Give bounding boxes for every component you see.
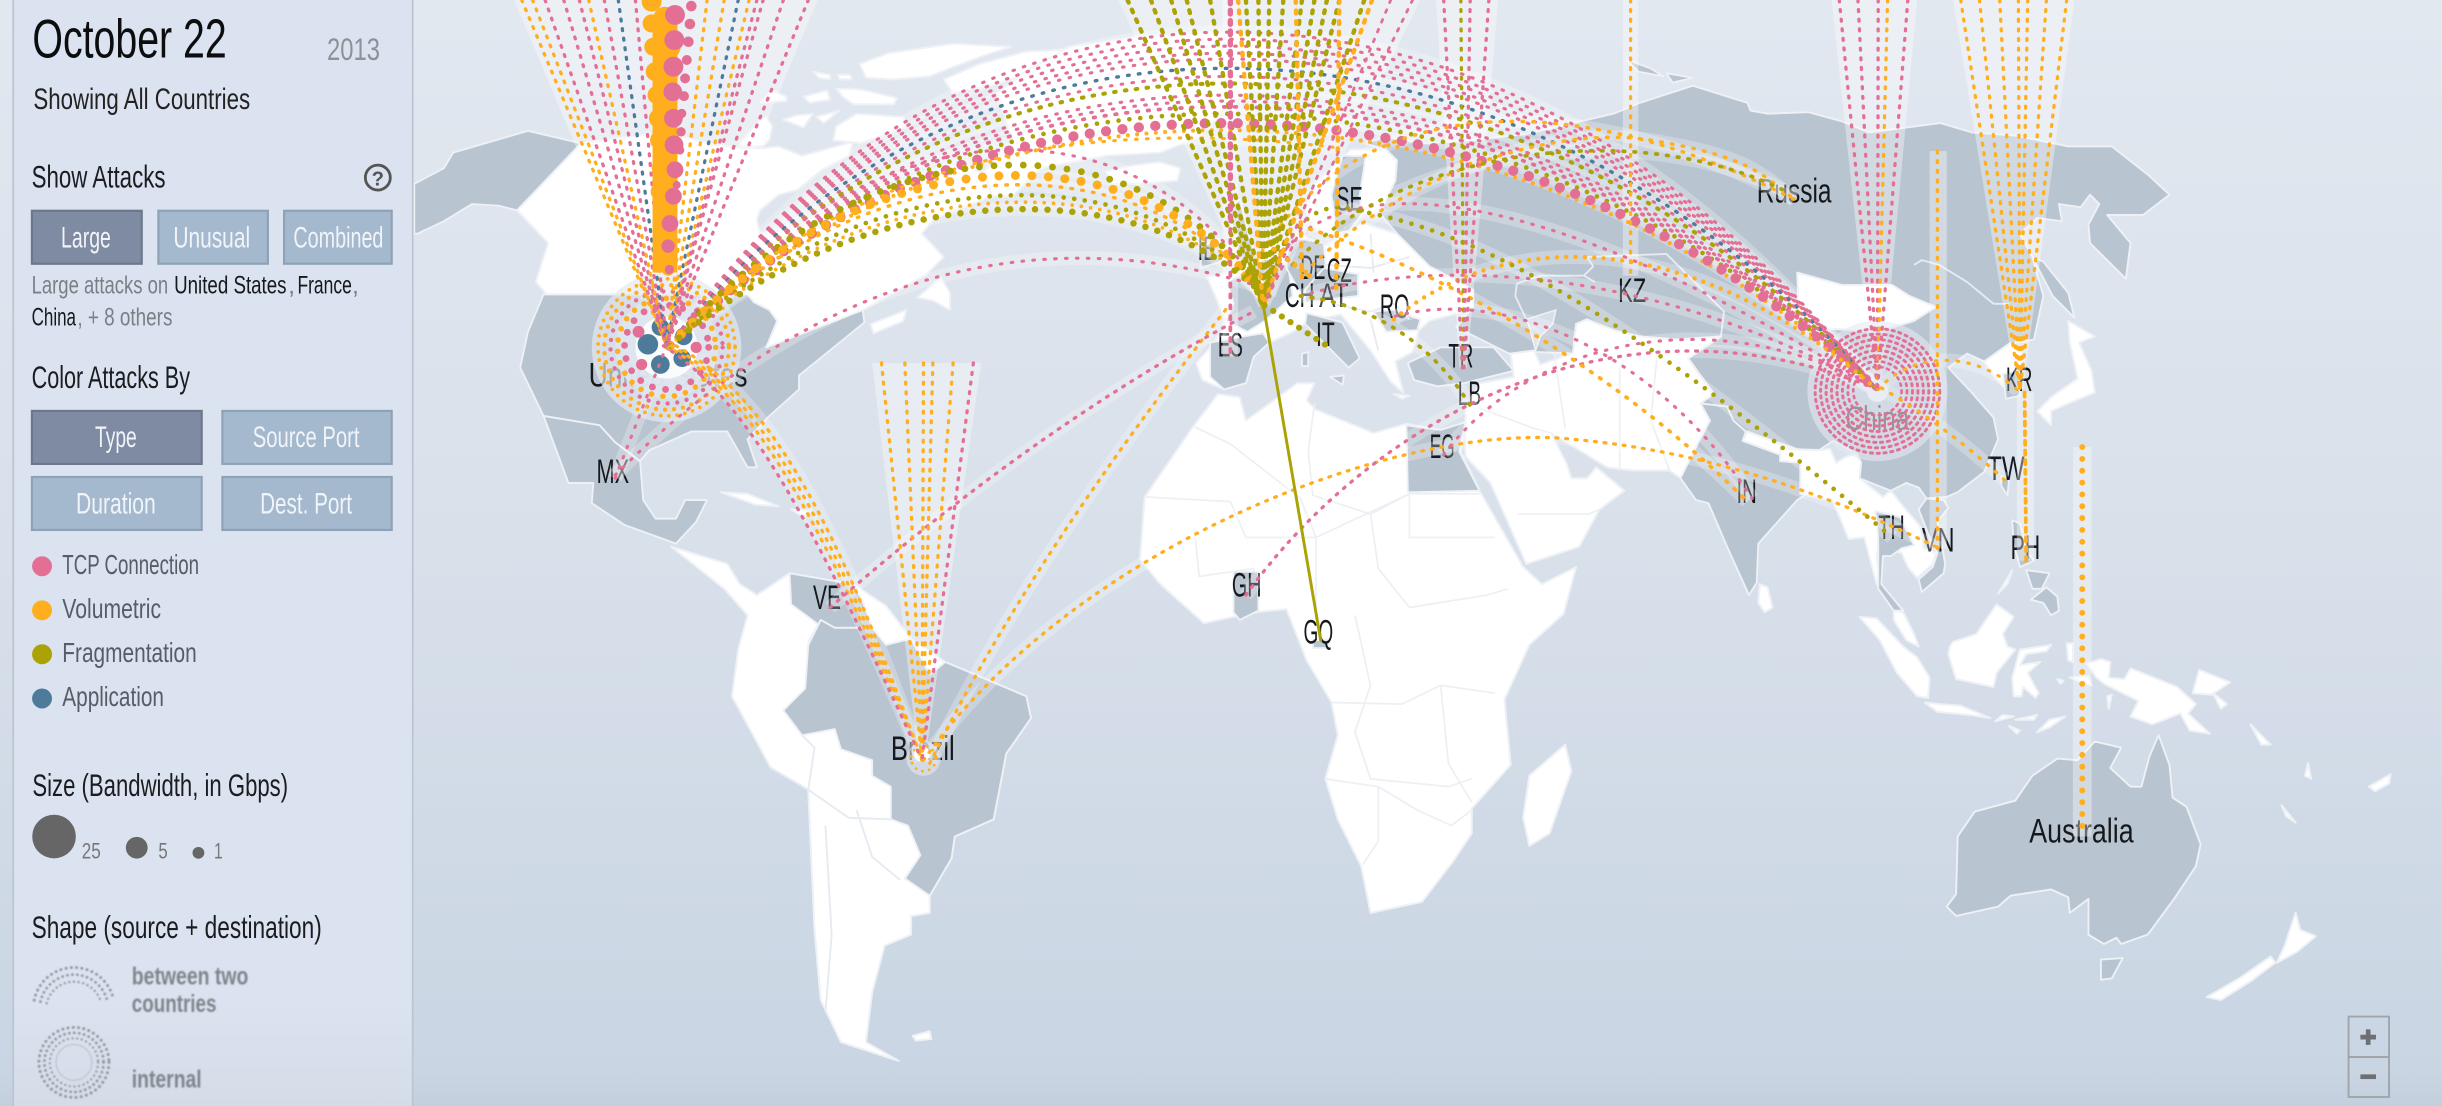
label: United States: United States <box>589 356 748 394</box>
legend: Application <box>32 681 164 712</box>
size legend: 5 <box>158 838 168 863</box>
label: China: China <box>1846 400 1910 438</box>
shape legend: internal: internal <box>132 1065 202 1093</box>
label: VN: VN <box>1922 521 1955 559</box>
country: Brazil <box>783 620 1031 896</box>
description of large attacks: , <box>352 272 359 300</box>
land: Caribbean <box>721 492 810 517</box>
label: TW: TW <box>1987 450 2025 488</box>
land: Canadian Arctic islands <box>740 44 1067 333</box>
label: EG: EG <box>1430 428 1455 466</box>
button: Dest. Port <box>222 477 392 530</box>
country: UK <box>1226 199 1258 265</box>
internal attacks circle: China <box>1807 321 1948 461</box>
country: Italy <box>1305 313 1360 368</box>
land: Korea <box>1984 343 2025 389</box>
country labels <box>589 173 2134 851</box>
borders: Africa <box>1145 403 1508 865</box>
land: Mongolia <box>1797 273 1936 332</box>
legend: Volumetric <box>32 593 161 624</box>
country: Egypt <box>1406 422 1480 492</box>
title: date: October 22 <box>32 9 227 70</box>
land: South America <box>671 547 1031 1061</box>
borders: Middle East <box>1480 355 1670 514</box>
button: Combined: Combined <box>293 222 383 255</box>
label: IN: IN <box>1736 473 1757 511</box>
size legend: 1 <box>214 838 223 863</box>
legend: Fragmentation: Fragmentation <box>62 637 197 668</box>
borders: South America <box>771 735 900 1013</box>
heading: Show Attacks: Show Attacks <box>32 160 166 195</box>
subtitle: Showing All Countries <box>33 83 250 116</box>
land: Caspian Sea <box>1526 310 1556 350</box>
world map <box>414 31 2391 1061</box>
country: Romania <box>1374 310 1420 332</box>
arc halos <box>615 32 2018 763</box>
label: SE: SE <box>1336 180 1363 218</box>
country: France <box>1226 259 1293 332</box>
land: Falklands <box>913 1031 931 1041</box>
land: Novaya Zemlya <box>1626 59 1693 83</box>
description of large attacks: Large attacks on <box>32 272 168 300</box>
country: Sweden <box>1332 156 1366 234</box>
land: Africa <box>1140 383 1576 913</box>
attack lines: Mexico <box>615 258 1265 478</box>
sidebar panel <box>13 0 413 1106</box>
description of large attacks: United States <box>174 272 287 300</box>
country: Venezuela <box>790 573 872 642</box>
land: Europe <box>1196 223 1475 393</box>
description of large attacks: China <box>32 304 76 332</box>
land: Canada <box>517 132 1009 347</box>
land: Indonesia <box>1860 604 2112 734</box>
legend: TCP Connection <box>32 549 199 580</box>
attack plume: Brazil <box>881 363 973 760</box>
country: Ireland <box>1201 240 1221 268</box>
legend: Volumetric: Volumetric <box>62 593 161 624</box>
borders: Balkans and Eastern Europe <box>1332 304 1409 319</box>
shape legend: between two countries: between two <box>132 962 248 990</box>
attack lines: Italy, Germany, Equatorial Guinea <box>1263 249 1327 640</box>
country: Turkey <box>1408 347 1514 386</box>
attack line: Vietnam <box>1936 151 1938 548</box>
attack line: Spain <box>1229 0 1232 357</box>
attack line: Kazakhstan <box>1630 0 1632 276</box>
attack line: Australia <box>2080 447 2084 837</box>
land: Greenland <box>984 31 1280 196</box>
attack arcs: Europe and Asia <box>1246 121 2018 537</box>
land: Nepal strip <box>1743 431 1799 461</box>
button: Large <box>32 211 142 264</box>
shape legend: internal <box>39 1027 202 1097</box>
land: Middle East, Iran and Central Asia <box>1466 319 1721 564</box>
label: PH: PH <box>2011 529 2040 567</box>
icon: zoom out <box>2360 1075 2376 1078</box>
country: Taiwan <box>2001 477 2009 495</box>
zoom control <box>2349 1017 2389 1097</box>
description of large attacks: , + 8 others <box>77 304 172 332</box>
country: South Korea <box>2003 371 2020 399</box>
country: Austria and Czechia <box>1305 268 1358 302</box>
land: Scandinavia <box>1305 150 1397 237</box>
label: ES: ES <box>1218 327 1243 365</box>
country: Australia <box>1947 735 2201 944</box>
plume halos <box>514 0 2092 837</box>
button: Unusual <box>158 211 268 264</box>
country: Thailand <box>1875 511 1914 611</box>
heading: Size: Size (Bandwidth, in Gbps) <box>32 768 288 803</box>
label: AT: AT <box>1319 277 1349 315</box>
label: VE: VE <box>813 579 841 617</box>
land: Sakhalin <box>2032 257 2074 318</box>
country: Germany <box>1286 237 1327 293</box>
legend: TCP Connection: TCP Connection <box>62 549 199 580</box>
heading: Color Attacks By: Color Attacks By <box>32 360 190 395</box>
description of large attacks <box>32 272 359 332</box>
attack plume: Europe <box>1128 0 1413 307</box>
land: Madagascar <box>1523 745 1571 846</box>
button: Combined <box>284 211 392 264</box>
borders: Russia <box>1914 260 2009 304</box>
land: Mediterranean islands <box>1302 352 1409 399</box>
internal attacks circle: Brazil <box>906 741 941 776</box>
country: India <box>1680 403 1819 595</box>
label: CZ: CZ <box>1327 252 1352 290</box>
shape legend: between two countries <box>34 962 248 1018</box>
attack plume: United States <box>522 0 808 346</box>
attack plume: Turkey <box>1444 0 1489 368</box>
label: IE: IE <box>1198 230 1216 268</box>
button: Unusual: Unusual <box>173 222 250 255</box>
country: Russia, Kazakhstan and China <box>1364 86 2169 498</box>
label: DE: DE <box>1300 249 1325 287</box>
button: Large: Large <box>61 222 111 255</box>
label: MX: MX <box>596 453 629 491</box>
button: Duration: Duration <box>76 487 156 520</box>
country: Alaska <box>414 131 581 234</box>
button: Type: Type <box>95 421 137 454</box>
land: New Guinea <box>2087 659 2210 734</box>
country: Vietnam <box>1919 498 1948 592</box>
label: IT: IT <box>1316 316 1335 354</box>
label: TR: TR <box>1448 338 1473 376</box>
country: United States <box>520 294 864 467</box>
size legend <box>32 815 223 863</box>
attacks arcs: United States to China <box>670 32 1877 389</box>
legend: Fragmentation <box>32 637 197 668</box>
country: Ghana <box>1233 572 1258 620</box>
icon: help <box>365 165 390 190</box>
button: Source Port <box>222 411 392 464</box>
label: GH: GH <box>1232 567 1261 605</box>
description of large attacks: , <box>288 272 295 300</box>
attack arcs: Brazil, Venezuela and Ghana <box>830 304 1939 763</box>
internal attacks circle: United States <box>592 273 741 422</box>
country: Philippines <box>1998 520 2059 615</box>
land: Pacific islands <box>2193 670 2391 822</box>
country: Mexico <box>544 416 707 544</box>
shape legend: between two countries: countries <box>132 990 216 1018</box>
size legend: 25 <box>82 838 101 863</box>
label: TH: TH <box>1878 509 1905 547</box>
land: Japan <box>2037 321 2095 425</box>
land: Malay peninsula <box>1894 611 1919 646</box>
attack plume: China <box>1839 0 1908 389</box>
country: Spain <box>1210 333 1269 389</box>
legend: Application: Application <box>62 681 164 712</box>
icon: help: ? <box>372 168 384 190</box>
label: CH: CH <box>1285 277 1314 315</box>
description of large attacks: France <box>297 272 352 300</box>
attack line: Philippines <box>2025 393 2026 561</box>
land: Sri Lanka <box>1758 584 1772 612</box>
label: KR: KR <box>2006 361 2032 399</box>
button: Dest. Port: Dest. Port <box>260 487 352 520</box>
label: RO: RO <box>1380 288 1409 326</box>
attacks arcs: United States to France <box>670 138 1339 346</box>
label: Russia: Russia <box>1757 173 1832 211</box>
attack plume: South Korea <box>1961 0 2067 391</box>
label: Australia: Australia <box>2029 813 2134 851</box>
year: 2013 <box>327 32 380 67</box>
button: Type <box>32 411 202 464</box>
icon: zoom in <box>2360 1029 2376 1045</box>
label: Brazil: Brazil <box>891 730 955 768</box>
heading: Shape: Shape (source + destination) <box>32 910 322 945</box>
label: LB: LB <box>1458 375 1481 413</box>
land: New Zealand <box>2207 913 2316 1000</box>
attack band: United States to Brazil <box>663 346 922 760</box>
label: KZ: KZ <box>1618 272 1646 310</box>
button: Source Port: Source Port <box>253 421 359 454</box>
country: Tasmania <box>2101 958 2123 980</box>
country: Equatorial Guinea <box>1313 640 1328 648</box>
label: GQ: GQ <box>1304 613 1333 651</box>
button: Duration <box>32 477 202 530</box>
land: Southeast Asia <box>1780 449 1936 587</box>
land: Iceland <box>1106 162 1181 184</box>
